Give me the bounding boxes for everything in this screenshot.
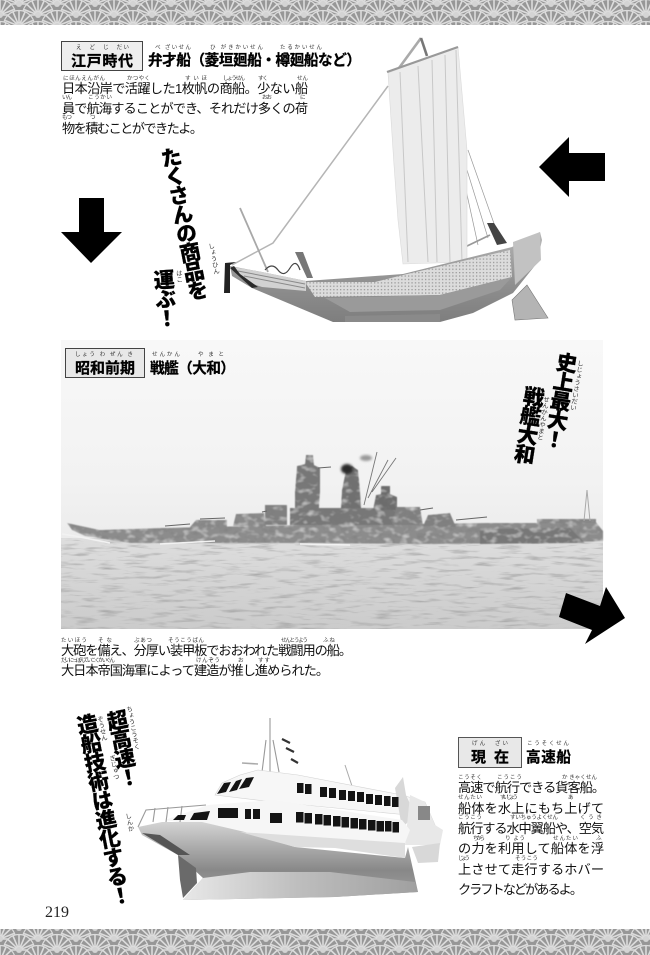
title: high-speed ship: こうそくせん [527, 740, 569, 747]
description text: present: 上させて走行するホバー [458, 862, 604, 877]
callout: shipbuilding technology evolves: ぞうせん [95, 715, 108, 742]
description text: present: くうき [580, 814, 602, 821]
description text: present: か きゃくせん [562, 774, 597, 781]
callout: many goods: はこ [174, 269, 183, 283]
callout: largest in history: 史上最大！ [540, 350, 579, 450]
description text: Edo: かつやく [127, 74, 150, 82]
description text: Edo: いん [62, 94, 72, 101]
description text: present: こうこう [497, 774, 522, 781]
callout: many goods [151, 145, 220, 328]
sail [387, 47, 467, 264]
section: present day heading and text [458, 738, 605, 897]
description text: present: り よう [505, 835, 525, 842]
description text: present: ふ [596, 835, 602, 842]
description text: present: こうこう [458, 814, 482, 821]
era label: early Showa: 昭和前期 [75, 359, 135, 377]
description text: Edo: つ [90, 115, 96, 121]
description text: Edo: すく [258, 75, 268, 82]
description text: battleship: せんとうよう [281, 637, 308, 644]
description text: present: そうこう [515, 855, 538, 862]
lower hull bulge [183, 872, 418, 900]
bottom patterned band [0, 929, 650, 955]
description text: battleship: たいほう [61, 637, 87, 644]
era label: Edo [62, 42, 142, 70]
title: Bezaisen: ひ がきかいせん [210, 43, 263, 51]
high-speed passenger ship photo [138, 718, 443, 900]
era label: present: 現 在 [471, 749, 509, 766]
title: high-speed ship [526, 740, 571, 766]
bow rail [138, 805, 206, 827]
era label: early Showa: しょう わ ぜん き [75, 351, 133, 358]
description text: Edo: もつ [62, 114, 72, 121]
description text: Edo: にほんえんがん [63, 74, 105, 82]
arrow: diagonal right [559, 587, 625, 644]
description text: Edo [62, 74, 308, 136]
description text: present: 高速で航行できる貨客船。 [458, 779, 605, 795]
bow tassel [224, 262, 236, 293]
description text: Edo: こうかい [88, 94, 112, 101]
gun barrels, masts and waterline [62, 452, 590, 545]
description text: present: 船体を水上にもち上げて [458, 801, 604, 816]
mast [242, 718, 352, 786]
era label: present: げん ざい [472, 739, 508, 747]
arrow: left [539, 137, 605, 197]
arrow: down [61, 198, 122, 263]
description text: Edo: に [300, 94, 306, 101]
description text: present: すいちゅうよくせん [510, 814, 558, 821]
description text: present: の力を利用して船体を浮 [458, 841, 604, 856]
description text: present: こうそく [458, 774, 482, 781]
callout: largest in history: せんかんやまと [535, 395, 550, 441]
windows [173, 777, 399, 832]
title: Bezaisen: たるかいせん [280, 44, 322, 51]
sea [61, 538, 603, 629]
page number: 219 [45, 904, 69, 921]
lower deck [165, 800, 410, 843]
rear pylon and stern structure [395, 777, 443, 845]
deck gear [265, 223, 507, 278]
description text: battleship: そな [98, 637, 112, 644]
funnel smoke [341, 455, 372, 474]
description text: battleship: 大砲を備え、分厚い装甲板でおおわれた戦闘用の船。 [61, 643, 352, 658]
rudder [512, 285, 548, 320]
description text: present: じょう [458, 855, 470, 862]
description text: present: すいじょう [500, 794, 518, 801]
description text: battleship: そうこうばん [168, 636, 204, 644]
description text: battleship: だいにっぽんていこくかいぐん [61, 656, 115, 664]
bow underside [142, 833, 190, 855]
wooden cargo ship photo [224, 38, 548, 322]
battleship silhouette [67, 455, 603, 544]
callout: largest in history: 戦艦大和 [510, 384, 546, 467]
callout: many goods: 運ぶ！ [151, 268, 178, 328]
title: battleship Yamato: 戦艦（大和） [150, 359, 235, 377]
battleship photo [61, 340, 603, 629]
description text: Edo: おお [262, 94, 272, 101]
title: battleship Yamato: せんかん [152, 351, 180, 358]
description text: present: ちから [473, 835, 485, 842]
description text: present: せんたい [553, 835, 578, 842]
description text: Edo: せん [297, 75, 308, 82]
rigging lines [232, 38, 497, 272]
description text: present [458, 774, 605, 897]
strut [178, 855, 197, 898]
description text: present: せんたい [458, 794, 482, 801]
rear hull [412, 843, 440, 863]
main hull [138, 822, 418, 900]
callout: many goods: しょうひん [206, 242, 220, 275]
sky [61, 340, 603, 540]
description text: present: あ [568, 794, 574, 801]
description text: Edo: すいほ [185, 75, 207, 82]
callout: shipbuilding technology evolves: しんか [123, 812, 134, 833]
callout: largest in history [510, 350, 584, 467]
description text: battleship: ぶあつ [134, 637, 152, 644]
title: Bezaisen [148, 43, 361, 69]
description text: battleship [61, 636, 352, 678]
description text: battleship: けんぞう [196, 657, 220, 664]
description text: battleship: すす [258, 657, 270, 664]
upper deck [215, 770, 435, 825]
description text: present: 航行する水中翼船や、空気 [458, 821, 604, 836]
description text: Edo: 日本沿岸で活躍した1枚帆の商船。少ない船 [62, 81, 308, 96]
title: high-speed ship: 高速船 [526, 748, 571, 766]
callout: super fast: ちょうこうそく [124, 705, 140, 751]
era label: Edo: 江戸時代 [71, 53, 133, 70]
description text: Edo: 物を積むことができたよ。 [62, 121, 203, 136]
title: battleship Yamato: や ま と [198, 350, 224, 358]
era label: early Showa [66, 348, 144, 378]
title: Bezaisen: べ ざいせん [155, 43, 191, 51]
section: Edo period heading and text [62, 42, 361, 136]
callout: largest in history: しじょうさいだい [568, 359, 584, 411]
callout: many goods: たくさんの商品を [157, 145, 209, 303]
description text: Edo: 員で航海することができ、それだけ多くの荷 [62, 101, 308, 116]
description text: Edo: しょうせん [223, 75, 245, 82]
callout: super fast: 超高速！ [103, 708, 141, 788]
top patterned band [0, 0, 650, 25]
description text: battleship: ふね [323, 637, 335, 644]
title: Bezaisen: 弁才船（菱垣廻船・樽廻船など） [148, 51, 361, 69]
callout: shipbuilding technology evolves: ぎじゅつ [107, 753, 120, 781]
title: battleship Yamato [150, 350, 235, 377]
hull [230, 232, 542, 322]
description text: present: クラフトなどがあるよ。 [458, 882, 583, 897]
era label: Edo: え ど じ だい [76, 43, 129, 51]
description text: battleship: 大日本帝国海軍によって建造が推し進められた。 [61, 663, 329, 678]
description text: battleship: お [238, 657, 244, 664]
callout: shipbuilding technology evolves: 造船技術は進化する！ [73, 712, 133, 907]
era label: present [458, 738, 522, 768]
hull skirt [240, 832, 405, 858]
